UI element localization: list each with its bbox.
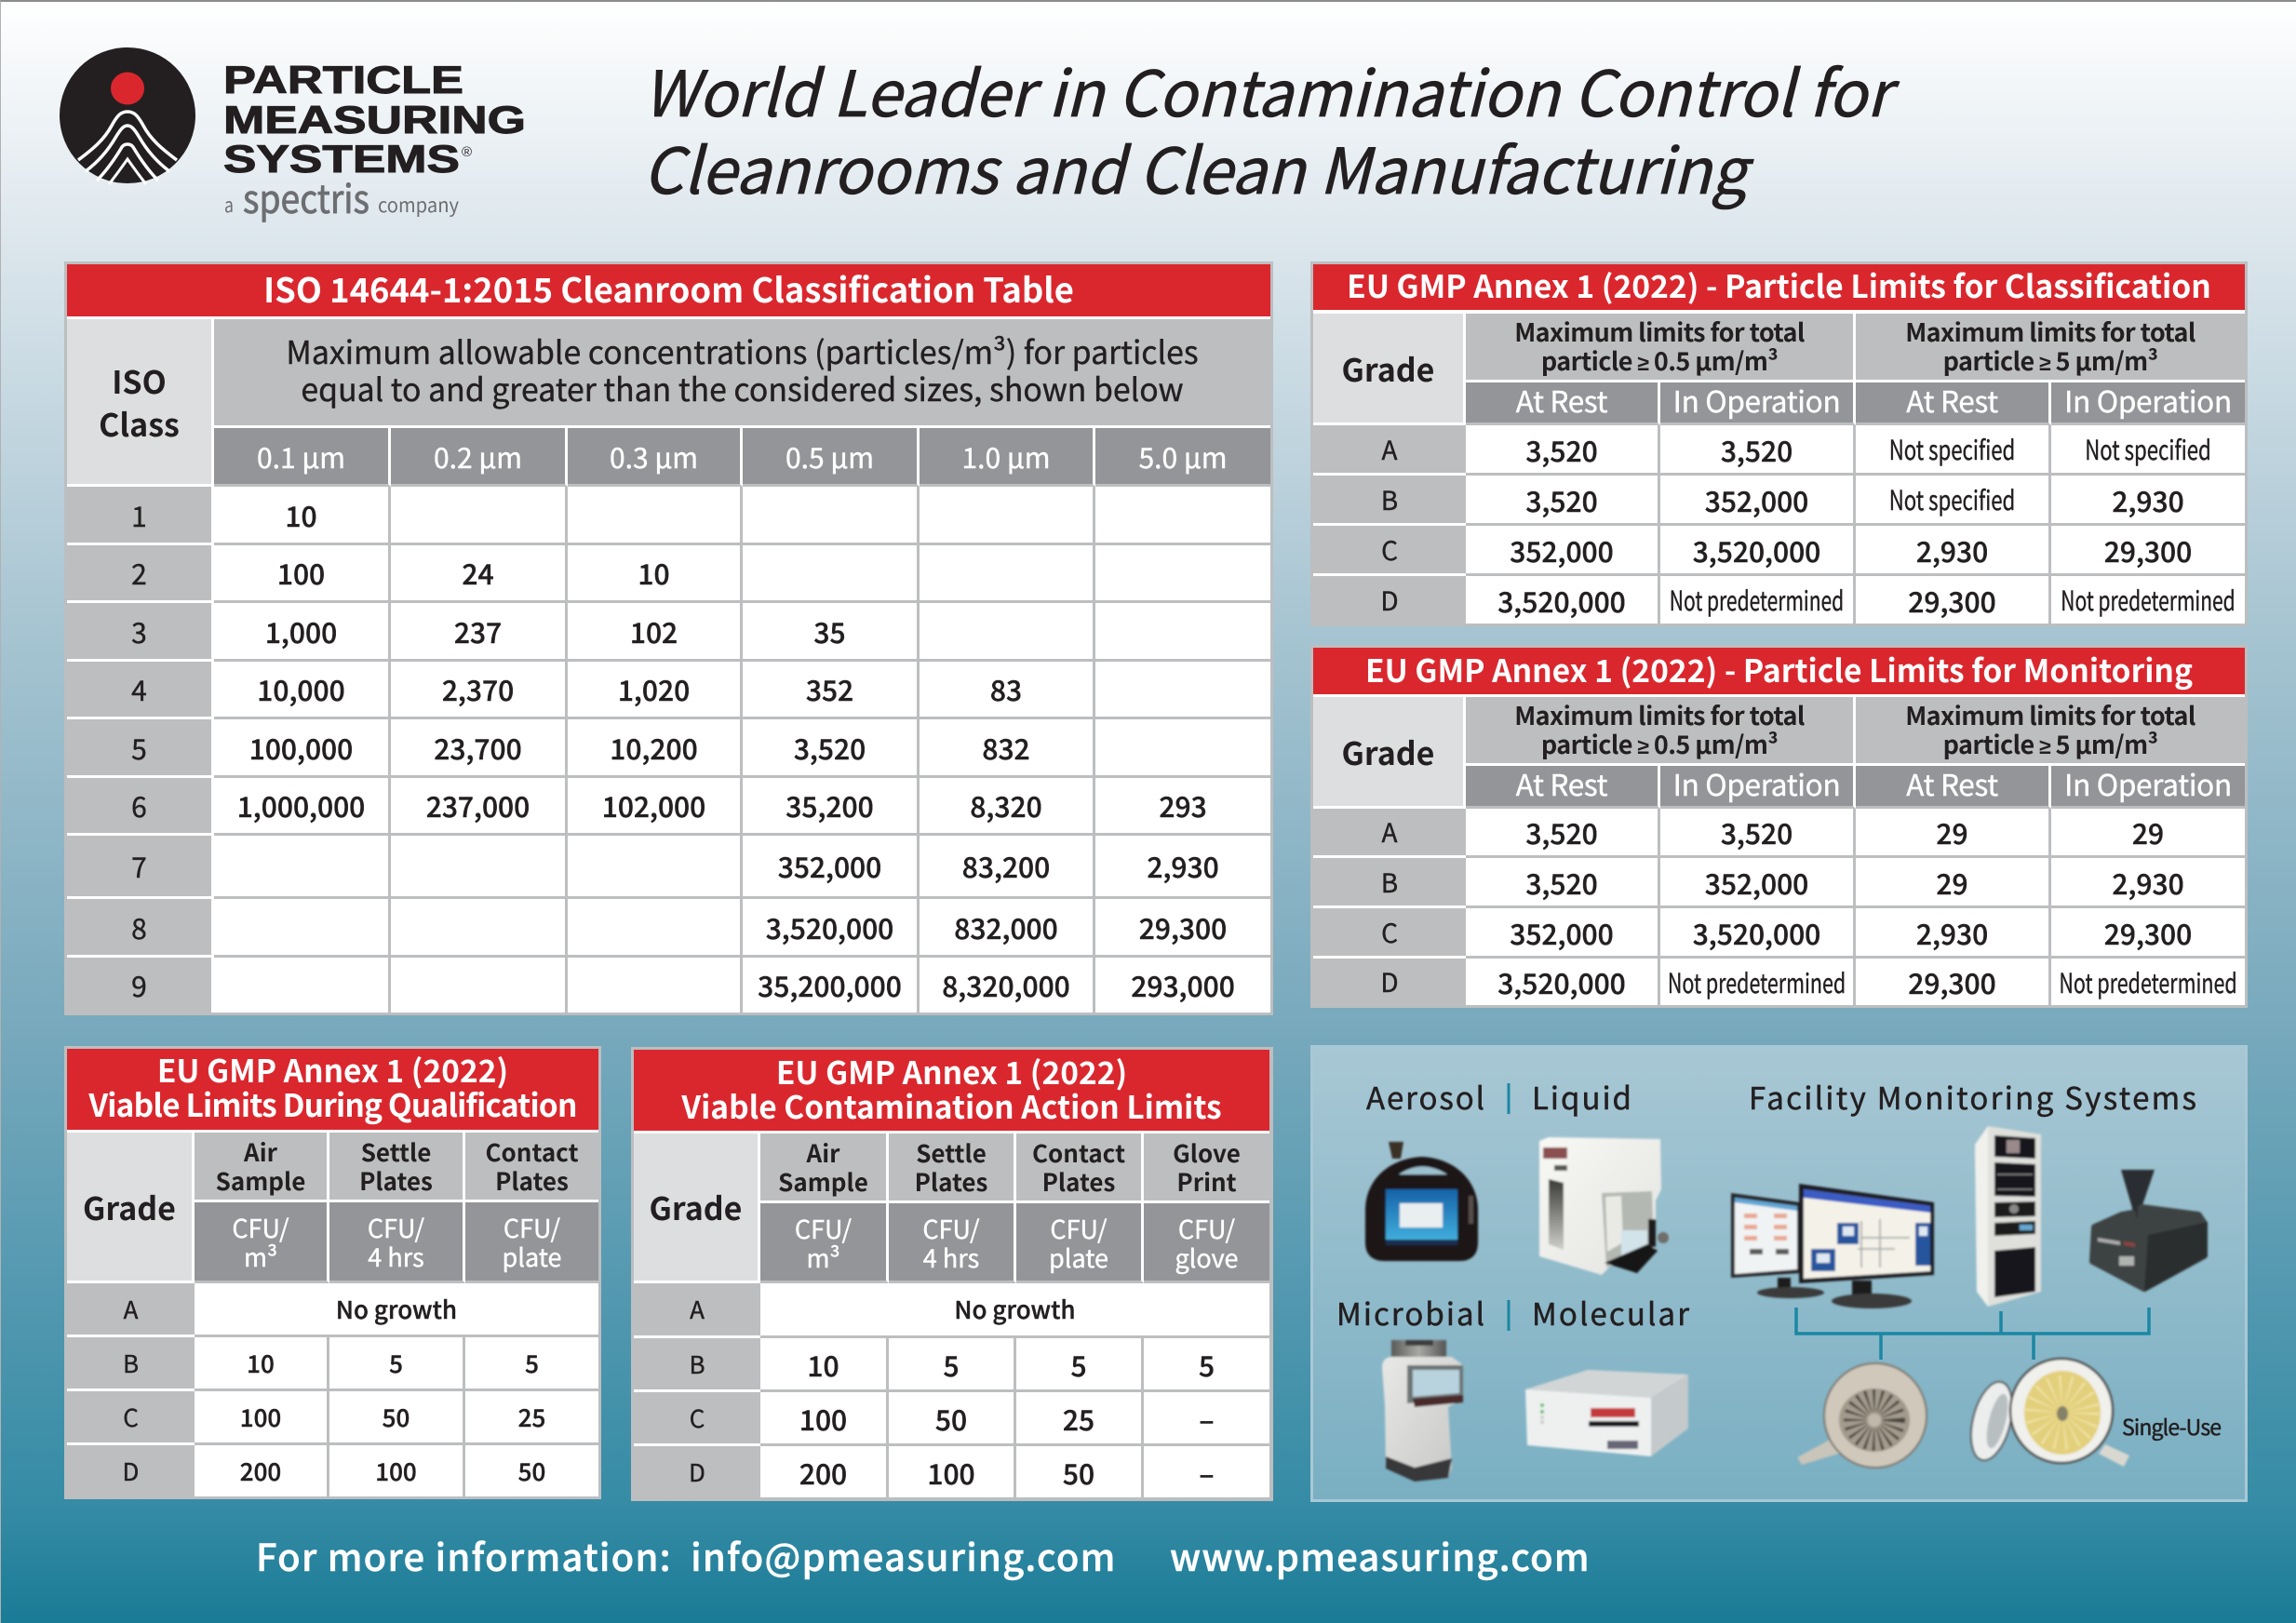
table header: sample types: Grade: [83, 1184, 176, 1228]
logo: Particle Measuring Systems: [60, 47, 526, 225]
table header: particle sizes: 0.5 µm: [785, 436, 874, 476]
table header: limits: particle ≥ 5 µm/m³: [1943, 724, 2157, 761]
logo wordmark: ®: [462, 144, 472, 160]
row: grade A: [634, 1283, 1269, 1338]
row: class 5: 5: [131, 726, 147, 767]
row: grade D: [67, 1445, 545, 1496]
row: class 5: [67, 719, 1270, 778]
row: grade A: [67, 1283, 598, 1337]
row: grade A: 3,520: [1721, 428, 1792, 469]
heading: monitoring: EU GMP Annex 1 (2022) - Particle Limits for Monitoring: [1365, 646, 2193, 691]
row: class 5: 3,520: [794, 726, 866, 767]
heading: classification: EU GMP Annex 1 (2022) - Particle Limits for Classification: [1347, 262, 2211, 307]
logo tagline: a spectris company: a: [224, 191, 234, 219]
row: class 4: 4: [131, 668, 147, 709]
row: class 6: 293: [1159, 785, 1207, 825]
row: class 7: 7: [131, 845, 147, 886]
table header: sample types: Air: [807, 1135, 839, 1170]
table header: states: At Rest: [1516, 379, 1607, 422]
row: grade B: 10: [247, 1346, 275, 1379]
row: grade C: 3,520,000: [1693, 912, 1820, 953]
heading: action limits: [634, 1050, 1269, 1133]
panel: viable limits during qualification: [64, 1046, 601, 1499]
table header: limits: [1313, 696, 2245, 1005]
row: class 6: 102,000: [602, 785, 705, 825]
panel: product lines: [1310, 1045, 2248, 1502]
row: grade D: D: [1380, 581, 1399, 618]
row: class 5: 100,000: [249, 726, 353, 767]
table header: sample types: Plates: [1042, 1164, 1115, 1199]
row: grade D: Not predetermined: [2059, 962, 2237, 1001]
row: grade D: 3,520,000: [1497, 579, 1626, 620]
panel: ISO 14644-1 classification table: [64, 262, 1273, 1015]
row: class 7: [67, 836, 1270, 899]
panel: EU GMP particle limits for classification: [1310, 262, 2248, 626]
table header: sample types: Air: [244, 1134, 277, 1169]
table header: states: At Rest: [1906, 762, 1998, 805]
row: grade B: 2,930: [2112, 478, 2184, 519]
row: grade A: A: [124, 1292, 138, 1325]
row: class 3: 102: [630, 610, 678, 651]
table header: limits: Grade: [1342, 344, 1434, 391]
table header: limits: Maximum limits for total: [1514, 313, 1805, 348]
row: class 3: 1,000: [265, 610, 337, 651]
table header: states: [1466, 379, 2245, 425]
table header: description: [67, 319, 1270, 1013]
icon: rack system: [1975, 1126, 2041, 1307]
logo wordmark: PARTICLE: [223, 58, 463, 101]
row: class 3: 35: [813, 610, 846, 651]
row: class 4: 2,370: [442, 668, 514, 709]
row: grade D: 29,300: [1908, 961, 1996, 1002]
row: class 5: 23,700: [434, 726, 522, 767]
table header: units: [195, 1202, 598, 1283]
row: grade A: 3,520: [1721, 812, 1792, 852]
table header: units: 4 hrs: [923, 1238, 979, 1275]
row: class 6: [67, 778, 1270, 836]
table header: states: In Operation: [1673, 762, 1840, 805]
row: grade B: B: [1381, 480, 1398, 517]
row: grade B: 3,520: [1525, 862, 1598, 903]
table header: limits: particle ≥ 0.5 µm/m³: [1541, 724, 1778, 761]
table header: sample types: Settle: [916, 1135, 987, 1170]
panel: viable contamination action limits: [631, 1047, 1273, 1501]
table header: sample types: Plates: [359, 1163, 433, 1198]
table header: states: In Operation: [1673, 379, 1840, 422]
table header: description: equal to and greater than the considered sizes, shown below: [301, 365, 1184, 410]
row: class 8: 3,520,000: [766, 906, 893, 947]
table header: units: 4 hrs: [368, 1238, 424, 1274]
icon: black particle counter: [2093, 1170, 2208, 1292]
row: grade B: 2,930: [2112, 862, 2184, 903]
row: class 9: [67, 958, 1235, 1013]
row: grade C: 50: [383, 1400, 410, 1433]
row: grade D: Not predetermined: [1668, 962, 1846, 1001]
table header: limits: Maximum limits for total: [1514, 696, 1805, 731]
row: grade D: 50: [518, 1454, 545, 1487]
row: grade B: 3,520: [1525, 478, 1598, 519]
table header: sample types: Print: [1176, 1164, 1237, 1199]
row: grade C: [634, 1392, 1269, 1446]
table header: units: CFU/: [1178, 1210, 1235, 1245]
title: Cleanrooms and Clean Manufacturing: [643, 120, 1747, 212]
table header: sample types: Contact: [485, 1134, 579, 1169]
table: classification limits: [1313, 314, 2245, 624]
label: Aerosol | Liquid: Liquid: [1532, 1074, 1631, 1119]
table header: units: m³: [244, 1238, 277, 1274]
table header: particle sizes: 5.0 µm: [1139, 436, 1228, 476]
row: grade C: [67, 1391, 598, 1445]
table header: particle sizes: 0.3 µm: [610, 436, 698, 476]
row: class 1: 1: [131, 493, 147, 534]
heading: qualification: EU GMP Annex 1 (2022): [157, 1046, 508, 1092]
row: class 1: [67, 487, 1270, 545]
table header: particle sizes: 1.0 µm: [962, 436, 1050, 476]
row: grade D: 200: [240, 1454, 281, 1487]
table header: description: Maximum allowable concentrations (particles/m³) for particles: [286, 328, 1199, 373]
logo tagline: a spectris company: company: [378, 191, 459, 219]
row: grade B: B: [123, 1346, 139, 1379]
row: grade C: 2,930: [1916, 529, 1988, 570]
label: Single-Use: Single-Use: [2122, 1410, 2222, 1442]
row: grade B: Not specified: [1889, 479, 2015, 518]
table header: units: CFU/: [1050, 1210, 1108, 1245]
row: grade D: [634, 1446, 1215, 1497]
table header: particle sizes: [214, 428, 1270, 487]
row: grade B: [634, 1338, 1269, 1392]
table header: limits: Maximum limits for total: [1905, 696, 2195, 731]
panel: EU GMP particle limits for monitoring: [1310, 645, 2248, 1008]
row: class 2: [67, 545, 1270, 603]
row: class 2: 100: [277, 552, 325, 593]
table header: particle sizes: 0.2 µm: [434, 436, 522, 476]
table header: sample types: Grade: [650, 1184, 742, 1229]
footer: contact information: For more information: info@pmeasuring.com: [256, 1528, 1117, 1582]
row: grade B: B: [689, 1346, 705, 1381]
table header: states: At Rest: [1906, 379, 1998, 422]
row: grade B: 5: [1070, 1344, 1087, 1385]
table header: units: glove: [1175, 1238, 1239, 1275]
row: class 9: 293,000: [1131, 964, 1235, 1005]
table header: sample types: Glove: [1173, 1135, 1241, 1170]
logo wordmark: SYSTEMS: [223, 137, 460, 181]
row: grade B: 29: [1936, 862, 1968, 903]
row: class 7: 352,000: [778, 845, 881, 886]
table: action limits: [634, 1133, 1269, 1497]
table: monitoring limits: [1313, 697, 2245, 1005]
row: grade A: 29: [1936, 812, 1968, 852]
icon: aerosol counter: [1365, 1142, 1478, 1261]
table header: limits: particle ≥ 5 µm/m³: [1943, 341, 2157, 378]
row: grade C: 100: [799, 1398, 847, 1439]
row: class 2: 24: [462, 552, 494, 593]
row: class 5: 832: [982, 726, 1030, 767]
icon: liquid counter: [1539, 1137, 1669, 1275]
logo tagline: a spectris company: [224, 168, 459, 225]
row: class 1: 10: [285, 493, 317, 534]
heading: ISO table: [67, 264, 1270, 319]
icon: molecular monitor: [1525, 1370, 1688, 1456]
table header: sample types: Plates: [915, 1164, 987, 1199]
table: ISO classes: [67, 319, 1270, 1013]
table header: states: At Rest: [1516, 762, 1607, 805]
row: class 6: 6: [131, 785, 147, 825]
row: grade A: Not specified: [1889, 429, 2015, 468]
row: grade A: No growth: [336, 1292, 457, 1325]
title: [643, 43, 1900, 212]
row: grade B: 5: [525, 1346, 539, 1379]
row: grade C: 2,930: [1916, 912, 1988, 953]
row: grade C: C: [1381, 530, 1398, 568]
logo wordmark: MEASURING: [223, 98, 526, 141]
row: grade C: –: [1199, 1398, 1215, 1439]
row: grade D: 3,520,000: [1497, 961, 1626, 1002]
row: grade D: 200: [799, 1452, 847, 1493]
row: grade D: 50: [1063, 1452, 1094, 1493]
row: grade B: 5: [1199, 1344, 1215, 1385]
row: class 6: 35,200: [785, 785, 874, 825]
row: grade D: Not predetermined: [2061, 580, 2236, 619]
label: Aerosol | Liquid: Aerosol: [1366, 1074, 1484, 1119]
title: World Leader in Contamination Control for: [643, 43, 1891, 135]
row: grade D: D: [1380, 963, 1399, 1000]
row: class 8: 832,000: [954, 906, 1058, 947]
table header: units: CFU/: [504, 1209, 560, 1245]
row: grade A: [1313, 425, 2245, 476]
icon: facility monitors: [1731, 1184, 1934, 1308]
label: Microbial | Molecular: [1336, 1290, 1689, 1335]
logo wordmark: [223, 58, 526, 181]
row: grade A: A: [1381, 813, 1398, 851]
row: class 8: 29,300: [1139, 906, 1227, 947]
row: class 7: 83,200: [962, 845, 1050, 886]
row: class 8: 8: [131, 906, 147, 947]
row: grade C: 25: [518, 1400, 545, 1433]
heading: qualification: [67, 1049, 598, 1133]
row: class 4: 83: [990, 668, 1022, 709]
icon: logo mark: [60, 47, 195, 184]
row: grade D: D: [689, 1454, 705, 1489]
row: class 3: 237: [454, 610, 502, 651]
table header: sample types: Settle: [361, 1134, 431, 1169]
row: class 3: 3: [131, 610, 147, 651]
row: grade C: 3,520,000: [1693, 529, 1820, 570]
row: grade B: 352,000: [1705, 478, 1808, 519]
row: grade A: A: [1381, 430, 1398, 467]
row: grade A: Not specified: [2085, 429, 2211, 468]
row: class 2: 10: [638, 552, 670, 593]
row: grade C: 25: [1063, 1398, 1094, 1439]
row: class 5: 10,200: [610, 726, 698, 767]
row: class 4: [67, 662, 1270, 719]
row: class 9: 8,320,000: [942, 964, 1070, 1005]
table header: units: plate: [503, 1238, 561, 1274]
row: grade B: 10: [807, 1344, 839, 1385]
row: grade B: [1313, 858, 2245, 908]
row: class 7: 2,930: [1147, 845, 1219, 886]
table header: description: Class: [99, 400, 180, 445]
row: grade D: 100: [927, 1452, 975, 1493]
label: Microbial | Molecular: Molecular: [1532, 1290, 1689, 1335]
icon: stainless impact plate: [1797, 1363, 1927, 1468]
row: grade D: D: [123, 1454, 139, 1487]
table header: particle sizes: 0.1 µm: [257, 436, 345, 476]
row: grade D: 29,300: [1908, 579, 1996, 620]
label: Aerosol | Liquid: [1366, 1074, 1631, 1119]
table header: units: [760, 1203, 1269, 1283]
row: grade B: 5: [389, 1346, 403, 1379]
row: class 6: 237,000: [426, 785, 530, 825]
row: grade C: C: [123, 1400, 139, 1433]
table header: sample types: Sample: [216, 1163, 305, 1198]
table header: units: m³: [806, 1238, 840, 1275]
row: grade A: [1313, 809, 2245, 858]
table header: units: CFU/: [922, 1210, 980, 1245]
row: grade B: 352,000: [1705, 862, 1808, 903]
table header: limits: Maximum limits for total: [1905, 313, 2195, 348]
row: grade C: 352,000: [1510, 912, 1614, 953]
row: grade B: 5: [943, 1344, 960, 1385]
row: class 6: 1,000,000: [237, 785, 365, 825]
row: class 3: [67, 603, 1270, 662]
table header: sample types: Sample: [778, 1164, 868, 1199]
row: grade A: No growth: [954, 1292, 1076, 1326]
row: grade D: –: [1199, 1452, 1215, 1493]
row: class 4: 352: [806, 668, 853, 709]
table header: units: plate: [1049, 1238, 1108, 1275]
table: qualification limits: [67, 1133, 598, 1496]
row: grade C: C: [690, 1400, 705, 1435]
text: www.pmeasuring.com: [1170, 1528, 1591, 1582]
row: grade A: 3,520: [1525, 428, 1598, 469]
row: class 9: 9: [131, 964, 147, 1005]
table header: sample types: Contact: [1032, 1135, 1125, 1170]
row: grade A: 3,520: [1525, 812, 1598, 852]
icon: connector bracket: [1796, 1308, 2149, 1360]
footer: contact information: [256, 1528, 1591, 1582]
row: grade C: 29,300: [2104, 912, 2192, 953]
row: class 4: 1,020: [618, 668, 690, 709]
heading: action limits: EU GMP Annex 1 (2022): [776, 1048, 1127, 1093]
row: class 9: 35,200,000: [758, 964, 902, 1005]
row: grade D: Not predetermined: [1670, 580, 1844, 619]
row: grade C: [1313, 526, 2245, 576]
icon: microbial sampler: [1382, 1340, 1463, 1482]
row: class 2: 2: [131, 552, 147, 593]
table header: limits: Grade: [1342, 728, 1434, 774]
row: grade A: A: [690, 1292, 705, 1326]
row: class 6: 8,320: [970, 785, 1042, 825]
table header: description: ISO: [112, 357, 167, 402]
row: grade D: [1313, 576, 2236, 624]
row: grade D: 100: [375, 1454, 417, 1487]
row: grade C: 50: [935, 1398, 967, 1439]
logo tagline: a spectris company: spectris: [243, 168, 369, 225]
row: grade C: 352,000: [1510, 529, 1614, 570]
row: grade B: [67, 1337, 598, 1391]
table header: units: CFU/: [368, 1209, 424, 1245]
row: grade B: B: [1381, 864, 1398, 901]
table header: limits: [1313, 313, 2245, 624]
table header: sample types: [67, 1133, 598, 1496]
heading: action limits: Viable Contamination Action Limits: [681, 1082, 1222, 1128]
table header: states: In Operation: [2064, 762, 2232, 805]
row: grade C: [1313, 908, 2245, 959]
heading: qualification: Viable Limits During Qualification: [88, 1080, 577, 1126]
row: grade C: 100: [240, 1400, 281, 1433]
row: grade B: [1313, 476, 2245, 526]
row: grade C: C: [1381, 914, 1398, 951]
heading: ISO table: ISO 14644-1:2015 Cleanroom Classification Table: [263, 264, 1074, 313]
row: grade A: 29: [2132, 812, 2164, 852]
table header: sample types: [634, 1133, 1269, 1497]
table header: limits: particle ≥ 0.5 µm/m³: [1541, 341, 1778, 378]
table header: states: In Operation: [2064, 379, 2232, 422]
label: Microbial | Molecular: Microbial: [1336, 1290, 1484, 1335]
row: class 4: 10,000: [257, 668, 345, 709]
table header: states: [1466, 762, 2245, 809]
icon: single-use plate: [1964, 1359, 2129, 1467]
row: grade D: [1313, 959, 2237, 1005]
row: grade C: 29,300: [2104, 529, 2192, 570]
table header: sample types: Plates: [495, 1163, 569, 1198]
table header: units: CFU/: [232, 1209, 289, 1245]
label: Facility Monitoring Systems: Facility Monitoring Systems: [1749, 1074, 2196, 1119]
table header: units: CFU/: [795, 1210, 852, 1245]
row: class 8: [67, 899, 1270, 958]
